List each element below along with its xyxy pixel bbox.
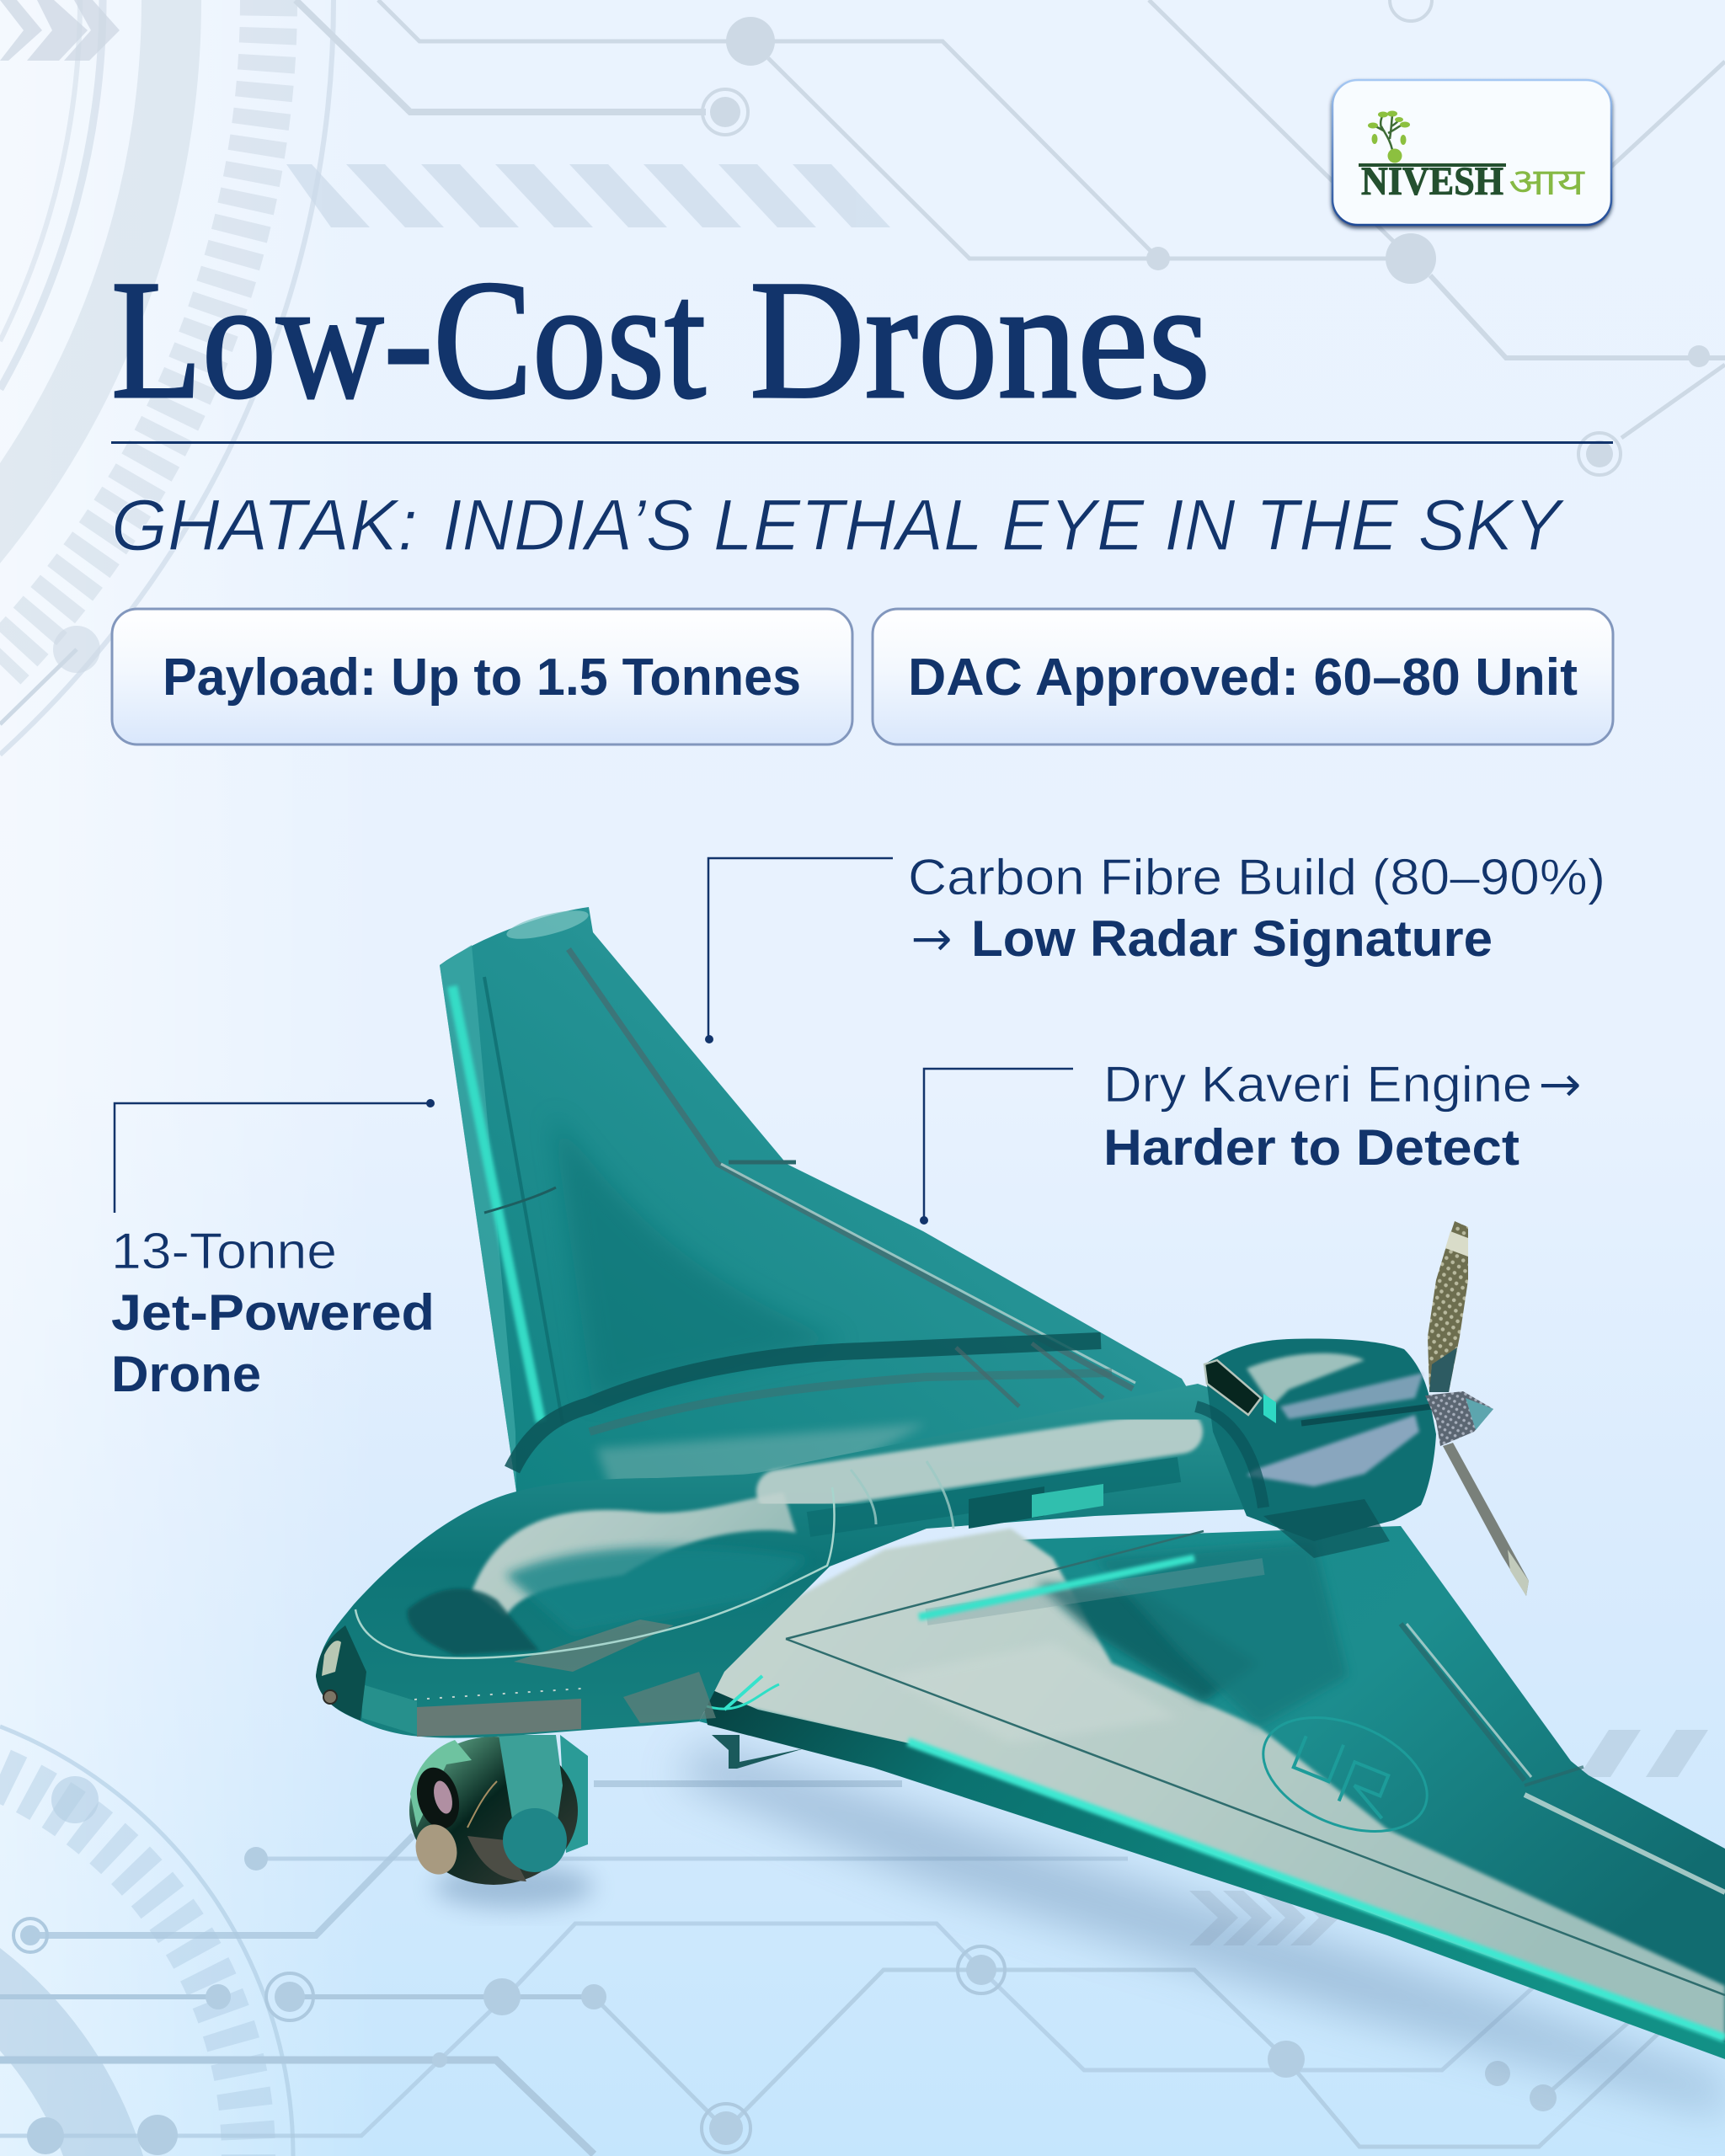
background: top-left arcs and ticks	[0, 0, 334, 755]
background: bottom circuit traces	[0, 1776, 1725, 2155]
logo wordmark: NIVESH	[1361, 159, 1503, 204]
drone: lower wing	[699, 1526, 1725, 2059]
callout: jet-powered drone: 13-Tonne	[111, 1223, 337, 1279]
drone illustration	[316, 905, 1725, 2059]
drone shadows	[434, 1743, 1725, 2114]
logo wordmark: आय	[1509, 162, 1586, 203]
drone: fuselage	[316, 1384, 1289, 1738]
stat pill: payload	[112, 609, 852, 744]
background: top circuit traces	[0, 0, 1725, 724]
stat pill: payload: Payload: Up to 1.5 Tonnes	[163, 648, 801, 707]
drone: upper wing	[440, 905, 1213, 1508]
background: top chevrons	[0, 0, 120, 61]
callout: jet-powered drone: Jet-Powered	[111, 1284, 435, 1341]
callout: harder to detect	[920, 1055, 1582, 1225]
callout: low radar signature: Low Radar Signature	[971, 910, 1493, 967]
drone: gimbal camera	[409, 1735, 588, 1885]
drone: propeller	[1425, 1221, 1529, 1596]
callout: jet-powered drone: Drone	[111, 1346, 261, 1402]
title: Drones	[750, 245, 1210, 434]
stat pill: DAC approved	[873, 609, 1613, 744]
title	[111, 245, 1210, 434]
logo card	[1332, 80, 1611, 225]
stat pill: DAC approved: DAC Approved: 60–80 Unit	[908, 648, 1578, 707]
callout: jet-powered drone	[111, 1099, 435, 1402]
callout: low radar signature: Carbon Fibre Build (80–90%)	[908, 849, 1605, 905]
title rule	[111, 441, 1613, 444]
drone: engine nacelle	[1196, 1339, 1436, 1558]
background: hazard stripes	[286, 164, 890, 227]
callout: harder to detect: Harder to Detect	[1103, 1119, 1519, 1176]
subtitle: GHATAK:	[111, 485, 418, 566]
callout: low radar signature: →	[911, 910, 953, 969]
callout: low radar signature	[705, 849, 1605, 1043]
background: bottom chevrons and stripes	[1189, 1730, 1708, 1945]
callout: harder to detect: →	[1538, 1055, 1582, 1114]
icon: logo tree	[1368, 111, 1410, 163]
background: bottom-left arcs and ticks	[0, 1726, 293, 2156]
drone: underwing strut	[712, 1735, 804, 1769]
logo wordmark	[1359, 159, 1586, 204]
callout: harder to detect: Dry Kaveri Engine	[1103, 1056, 1532, 1113]
title: Low-Cost	[111, 245, 706, 434]
drone: wing emblem	[1247, 1695, 1444, 1854]
subtitle: INDIA’S LETHAL EYE IN THE SKY	[442, 485, 1566, 566]
